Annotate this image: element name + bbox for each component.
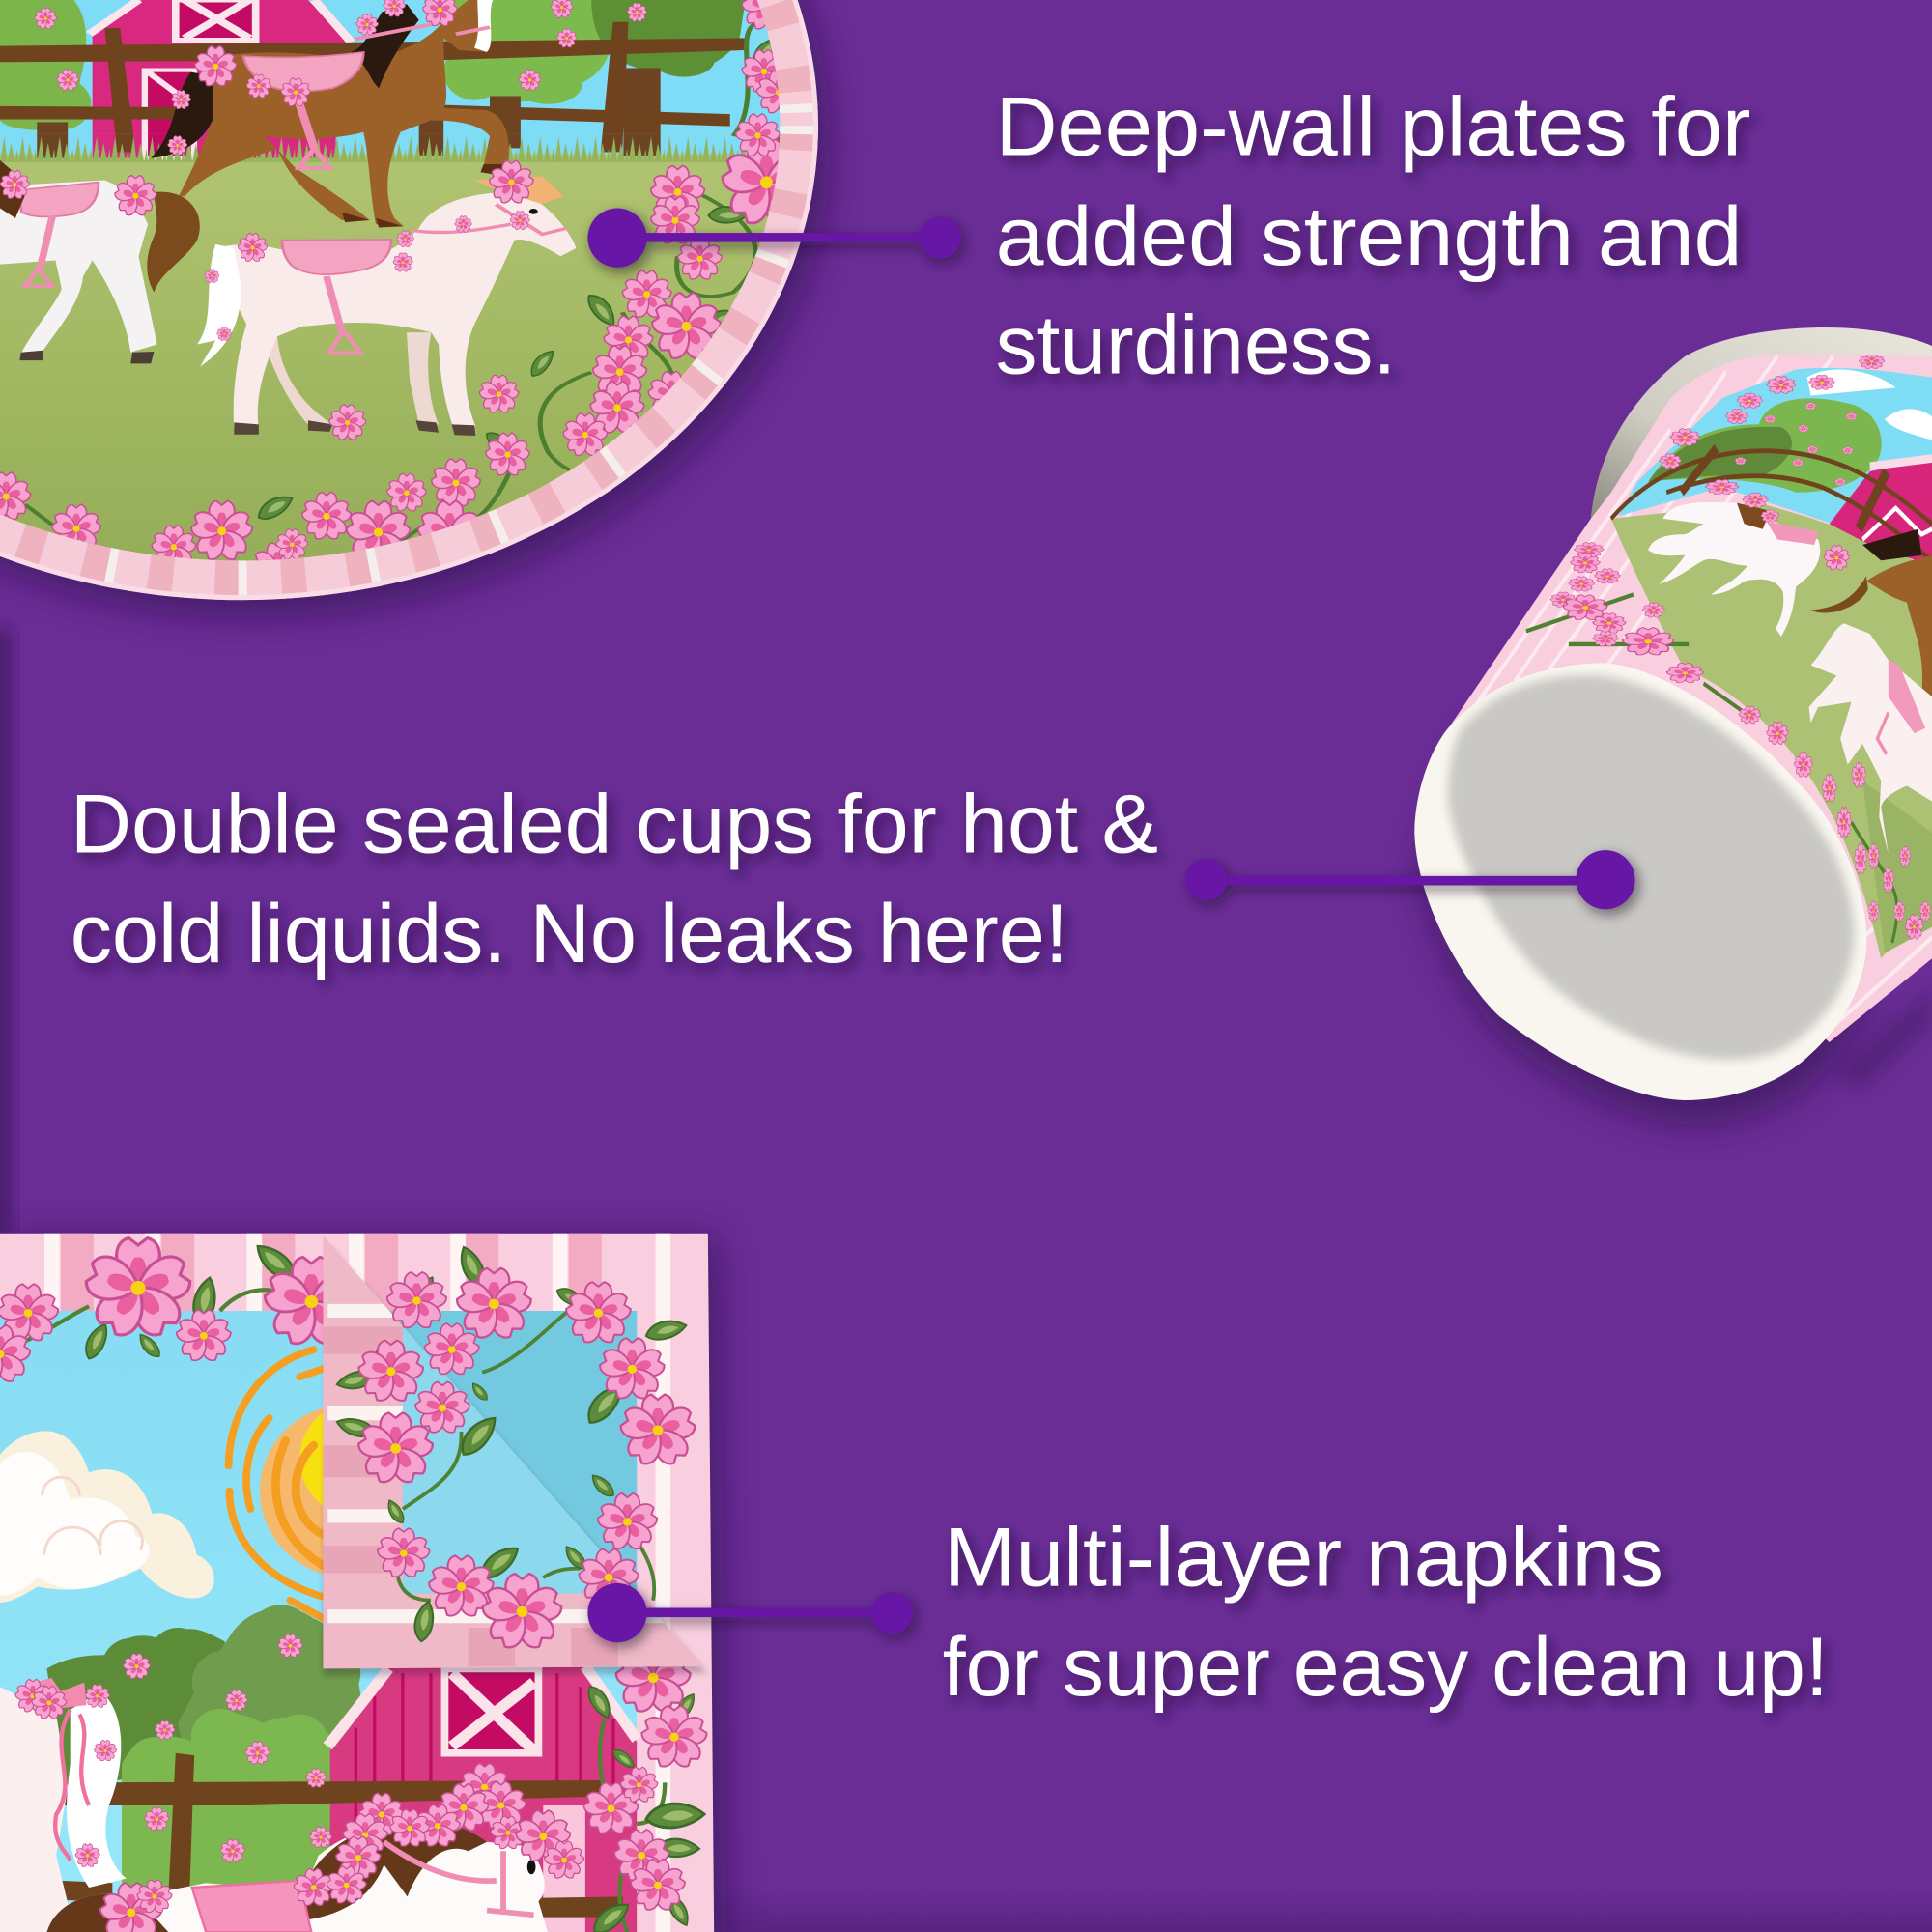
text block: plates: added strength and	[996, 190, 1743, 283]
cup flowers	[1549, 354, 1931, 941]
callout: plate connector	[587, 209, 961, 268]
napkin sky	[0, 1311, 637, 1932]
text block: cups	[71, 779, 1158, 980]
text block: plates	[996, 81, 1750, 391]
fence	[10, 1753, 623, 1918]
barn	[89, 0, 352, 158]
shaded sky beside the fold	[389, 1311, 640, 1596]
callout: cup connector	[1185, 850, 1635, 909]
plate rim stripes	[0, 0, 815, 598]
text block: napkins	[943, 1512, 1829, 1714]
panel: paper cup	[1414, 327, 1932, 1125]
sun	[229, 1350, 438, 1621]
fence	[0, 22, 749, 153]
plate vines	[25, 24, 755, 584]
text block: cups: cold liquids. No leaks here!	[71, 888, 1068, 980]
cup fence	[1611, 448, 1932, 560]
napkin border	[0, 1234, 714, 1932]
plate flowers	[0, 0, 813, 592]
flap shadow	[323, 1245, 707, 1676]
cup horse pale	[1809, 623, 1932, 854]
barn	[327, 1666, 637, 1932]
cup lip	[1591, 327, 1932, 519]
text block: plates: Deep-wall plates for	[996, 81, 1750, 174]
napkin white horse	[0, 1678, 127, 1932]
cup vines	[1526, 594, 1897, 943]
plate leaves	[107, 33, 785, 605]
grass blades	[0, 134, 757, 162]
napkin trees	[46, 1605, 361, 1901]
cup base	[1414, 663, 1866, 1100]
napkin pinto horse	[46, 1819, 548, 1932]
front white horse	[197, 176, 576, 436]
text block: cups: Double sealed cups for hot &	[71, 779, 1158, 871]
panel: napkin	[0, 1234, 727, 1932]
text block: napkins: for super easy clean up!	[943, 1621, 1829, 1714]
napkin vines and leaves	[10, 1239, 705, 1932]
cloud	[0, 1431, 214, 1603]
callout: napkin connector	[587, 1583, 913, 1642]
folded corner flap	[323, 1236, 702, 1668]
napkin lower flowers	[0, 1238, 709, 1932]
plate scene	[0, 0, 781, 560]
brown horse	[151, 0, 509, 227]
cup horse brown	[1866, 555, 1932, 702]
cup barn	[1830, 459, 1932, 566]
text block: napkins: Multi-layer napkins	[944, 1512, 1663, 1605]
text block: plates: sturdiness.	[996, 298, 1396, 391]
trees	[0, 0, 746, 158]
cup sky	[1619, 368, 1932, 540]
cup trees	[1648, 398, 1882, 493]
cup artwork	[1451, 354, 1932, 1042]
cup horse white	[1648, 502, 1820, 637]
left white horse	[0, 160, 200, 363]
